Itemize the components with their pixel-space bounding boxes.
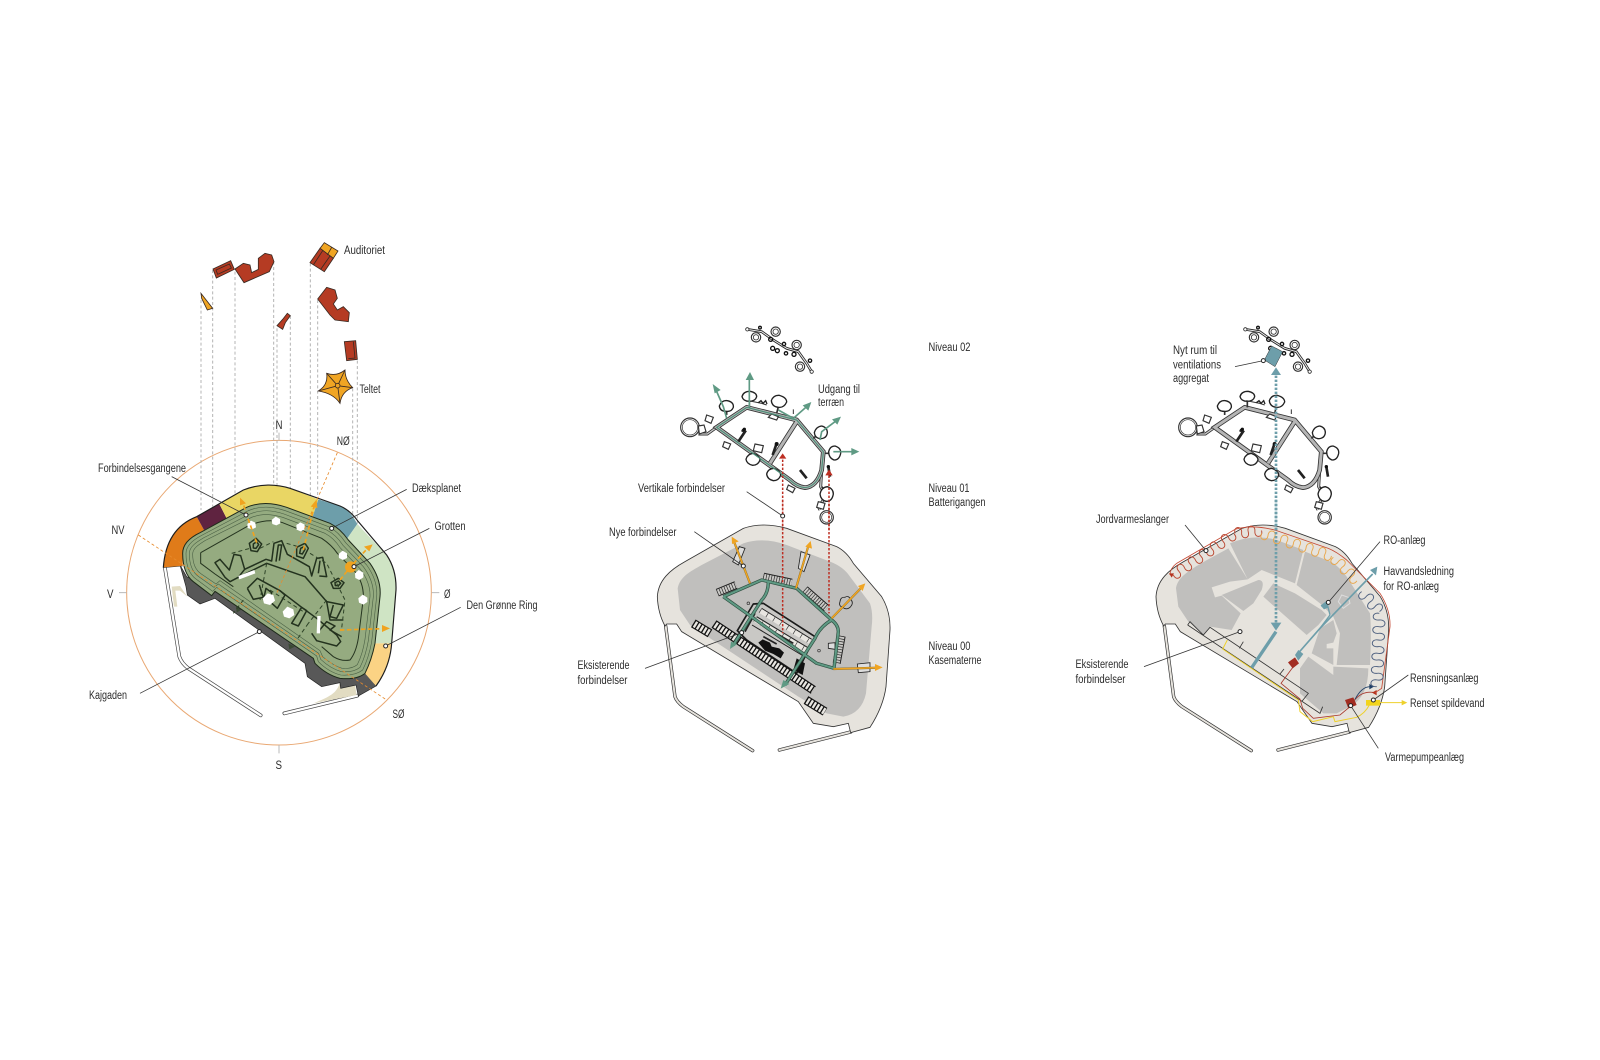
labels: left panel: N <box>276 420 282 432</box>
leader: Grotten <box>354 528 429 567</box>
Dæksplanet green deck <box>183 503 380 679</box>
labels: left panel: NV <box>112 525 125 537</box>
new rooms at arrows <box>733 547 870 673</box>
leader: Varmepumpeanlæg <box>1351 706 1378 748</box>
island base with systems <box>1144 500 1408 751</box>
labels: middle panel: forbindelser <box>578 675 628 687</box>
labels: left panel: NØ <box>337 436 350 448</box>
casemate block <box>737 603 815 675</box>
leader: Rensningsanlæg <box>1373 675 1408 700</box>
grey casemate fields <box>1176 537 1371 713</box>
labels: middle panel: Niveau 00 <box>928 641 970 653</box>
labels: middle panel: Batterigangen <box>928 497 986 509</box>
building: small <box>277 313 290 329</box>
leader: Jordvarmeslanger <box>1185 525 1206 551</box>
red pipe <box>1281 667 1375 718</box>
Teltet tent <box>318 370 353 403</box>
building: bar <box>213 261 234 278</box>
labels: right panel: RO-anlæg <box>1384 535 1426 547</box>
labels: middle panel: Vertikale forbindelser <box>638 483 725 495</box>
labels: left panel: Ø <box>444 589 451 601</box>
vertical projection lines <box>201 262 357 593</box>
labels: right panel: aggregat <box>1173 373 1210 385</box>
labels: middle panel: Eksisterende <box>578 660 630 672</box>
labels: right panel: Rensningsanlæg <box>1410 673 1478 685</box>
compass diagonals and arrows <box>138 453 387 700</box>
plans level 01 and 02 <box>1179 326 1339 524</box>
ground heat hoses <box>1170 525 1385 687</box>
heat pump and treatment plant <box>1345 697 1357 708</box>
leader: Forbindelsesgangene <box>172 477 246 515</box>
building: yellow sliver <box>201 293 213 310</box>
labels: left panel: S <box>276 760 282 772</box>
labels: right panel: ventilations <box>1173 360 1221 372</box>
compass ring <box>119 433 439 753</box>
building: blob <box>235 253 274 283</box>
labels: right panel <box>1076 345 1484 764</box>
labels: right panel: forbindelser <box>1076 674 1126 686</box>
labels: left panel: Auditoriet <box>344 245 386 257</box>
labels: middle panel: Nye forbindelser <box>609 527 677 539</box>
labels: left panel: V <box>107 589 114 601</box>
leader: Eksisterende forbindelser <box>645 633 742 668</box>
grey field <box>678 540 872 717</box>
panel: technical systems diagram <box>1076 326 1484 764</box>
leader: Nye forbindelser <box>694 532 743 566</box>
leader: RO-anlæg <box>1328 542 1380 602</box>
panel: program diagram with compass <box>89 243 538 772</box>
sea water pipe and RO plant <box>1297 574 1373 655</box>
green route <box>717 407 823 488</box>
labels: middle panel: terræn <box>818 397 844 409</box>
green ring segments <box>163 485 396 686</box>
labels: left panel: Kajgaden <box>89 690 127 702</box>
labels: left panel: Grotten <box>434 521 466 533</box>
labels: left panel: Teltet <box>360 384 381 396</box>
labels: left panel: Forbindelsesgangene <box>98 463 186 475</box>
quay piers <box>165 568 357 715</box>
labels: middle panel <box>578 342 986 687</box>
labels: right panel: Jordvarmeslanger <box>1096 514 1169 526</box>
labels: right panel: Renset spildevand <box>1410 698 1484 710</box>
island base level 00 <box>645 500 890 751</box>
Forbindelsesgangene inner corridors <box>215 538 344 646</box>
plans level 01 and 02 <box>681 326 859 530</box>
floating buildings <box>201 243 357 403</box>
labels: middle panel: Niveau 02 <box>928 342 970 354</box>
labels: left panel <box>89 245 538 772</box>
yellow arrows <box>734 542 878 669</box>
leader: Den Grønne Ring <box>386 607 461 646</box>
labels: left panel: SØ <box>392 709 405 721</box>
red vertical dotted lines lower <box>783 500 829 633</box>
labels: right panel: for RO-anlæg <box>1384 581 1439 593</box>
existing hatched rooms <box>693 577 842 712</box>
Grotten orange dot <box>345 561 356 573</box>
red vertical dotted lines <box>783 458 829 530</box>
exit arrows <box>716 380 852 452</box>
yellow waste line <box>1223 640 1369 722</box>
island plan <box>138 453 461 715</box>
panel: connections diagram <box>578 326 986 751</box>
leader: Eksisterende forbindelser <box>1144 632 1240 667</box>
labels: right panel: Eksisterende <box>1076 659 1128 671</box>
Kajgaden dark quay <box>180 565 376 696</box>
building: Auditoriet <box>310 243 338 272</box>
labels: left panel: Den Grønne Ring <box>466 600 538 612</box>
leader: Kajgaden <box>140 632 259 693</box>
outer red edge line <box>1170 527 1390 693</box>
labels: middle panel: Udgang til <box>818 384 860 396</box>
arrow: Renset spildevand <box>1380 700 1407 705</box>
labels: left panel: Dæksplanet <box>412 483 462 495</box>
labels: middle panel: Niveau 01 <box>928 483 970 495</box>
building: rectangle <box>344 341 357 361</box>
new connections: green <box>723 580 838 685</box>
labels: right panel: Havvandsledning <box>1384 566 1454 578</box>
building: blob two <box>318 287 349 322</box>
ventilation duct <box>1252 632 1276 668</box>
labels: middle panel: Kasematerne <box>928 655 982 667</box>
labels: right panel: Varmepumpeanlæg <box>1385 752 1464 764</box>
ventilation room and duct <box>1235 346 1283 530</box>
leader: Dæksplanet <box>332 489 407 528</box>
leader: Vertikale forbindelser <box>747 492 783 516</box>
labels: right panel: Nyt rum til <box>1173 345 1217 357</box>
existing connections outline <box>1188 622 1323 713</box>
